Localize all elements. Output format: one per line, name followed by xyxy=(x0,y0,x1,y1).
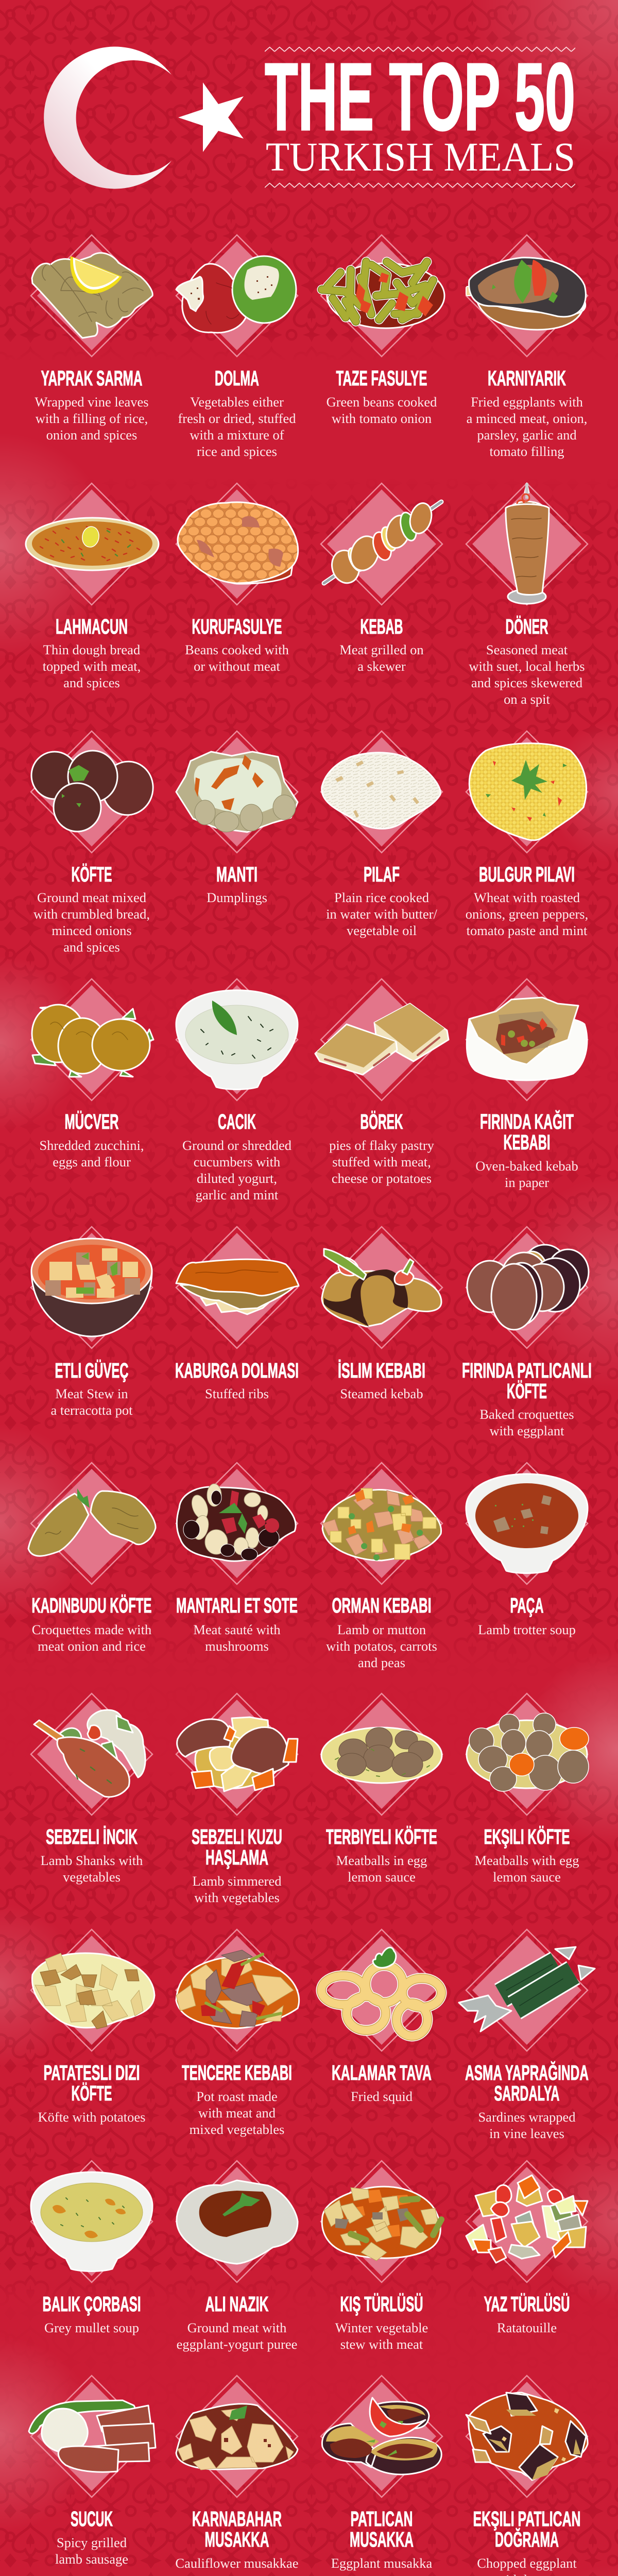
panel: Lahmacun xyxy=(26,483,159,690)
diamond xyxy=(466,979,588,1100)
description: cheese or potatoes xyxy=(332,1171,432,1186)
panel: Pilaf xyxy=(321,731,442,938)
description: Fried eggplants with xyxy=(471,394,583,410)
diamond xyxy=(176,2376,298,2497)
diamond xyxy=(466,1463,588,1584)
description: a terracotta pot xyxy=(51,1402,133,1418)
description: in paper xyxy=(505,1175,549,1190)
dish: tencere kebabi xyxy=(176,1950,299,2028)
icon: star xyxy=(178,82,244,152)
dish: yaz turlusu xyxy=(466,2175,588,2263)
dish: patlican musakka xyxy=(322,2398,441,2475)
description: rice and spices xyxy=(197,444,277,459)
description: eggplant-yogurt puree xyxy=(177,2336,297,2352)
panel: Yaz Turlusu xyxy=(466,2161,588,2335)
description: Green beans cooked xyxy=(327,394,437,410)
name line 2: DOĞRAMA xyxy=(495,2528,559,2551)
name line 2: SARDALYA xyxy=(494,2081,559,2105)
description: on a spit xyxy=(504,691,551,707)
dish: mucver xyxy=(32,1005,153,1077)
diamond xyxy=(466,2161,588,2282)
panel: Eksili Patlican Dograma xyxy=(466,2376,588,2576)
diamond xyxy=(176,1227,298,1348)
name: PILAF xyxy=(364,862,400,886)
name: SUCUK xyxy=(71,2507,113,2531)
description: Vegetables either xyxy=(190,394,284,410)
name: ALI NAZIK xyxy=(205,2292,269,2316)
name: PATLICAN xyxy=(350,2507,413,2531)
diamond xyxy=(31,1227,152,1348)
name: MÜCVER xyxy=(65,1110,118,1133)
panel: Orman Kebabi xyxy=(321,1463,442,1670)
description: and spices xyxy=(63,939,120,955)
diamond xyxy=(176,1693,298,1815)
name line 2: KEBABI xyxy=(504,1130,550,1154)
dish: ali nazik xyxy=(177,2180,298,2264)
description: Ground meat mixed xyxy=(37,890,146,905)
description: Meat grilled on xyxy=(339,642,424,657)
panel: Taze Fasulye xyxy=(321,235,444,426)
description: pies of flaky pastry xyxy=(329,1138,435,1153)
dish: kalamar tava xyxy=(321,1947,441,2036)
diamond xyxy=(176,235,298,357)
name: BÖREK xyxy=(360,1110,403,1133)
description: in water with butter/ xyxy=(326,906,437,922)
description: with tomato onion xyxy=(332,411,432,426)
description: and spices skewered xyxy=(471,675,582,690)
panel: Firinda Kagit Kebabi xyxy=(466,979,588,1190)
description: diluted yogurt, xyxy=(197,1171,277,1186)
description: Winter vegetable xyxy=(335,2320,428,2335)
description: Croquettes made with xyxy=(32,1622,151,1637)
description: mushrooms xyxy=(205,1638,269,1654)
description: onions, green peppers, xyxy=(466,906,588,922)
description: vegetable oil xyxy=(347,923,417,938)
panel: Dolma xyxy=(176,235,298,459)
dish: mantarli et sote xyxy=(177,1484,296,1561)
description: onion and spices xyxy=(46,427,137,443)
dish: asma yapraginda sardalya xyxy=(459,1947,595,2031)
description: tomato paste and mint xyxy=(467,923,588,938)
name: DÖNER xyxy=(506,615,548,638)
dish: patatesli dizi kofte xyxy=(32,1953,154,2029)
description: Wrapped vine leaves xyxy=(35,394,149,410)
panel: Kebab xyxy=(321,483,442,674)
name: MANTARLI ET SOTE xyxy=(176,1594,298,1617)
name: ETLI GÜVEÇ xyxy=(55,1359,129,1382)
name: BALIK ÇORBASI xyxy=(42,2292,141,2316)
description: Meat Stew in xyxy=(55,1386,128,1401)
diamond xyxy=(466,1693,588,1815)
name: KADINBUDU KÖFTE xyxy=(32,1594,151,1617)
description: Meatballs in egg xyxy=(336,1853,427,1868)
description: Shredded zucchini, xyxy=(39,1138,144,1153)
description: Baked croquettes xyxy=(479,1406,574,1422)
description: stew with meat xyxy=(340,2336,423,2352)
dish: kis turlusu xyxy=(322,2187,441,2261)
panel: Patatesli Dizi Kofte xyxy=(31,1929,154,2125)
dish: kebab xyxy=(324,501,441,586)
name: TERBIYELI KÖFTE xyxy=(326,1825,437,1849)
dish: dolma xyxy=(176,256,296,333)
description: garlic and mint xyxy=(196,1187,279,1202)
description: Spicy grilled xyxy=(57,2535,127,2550)
diamond xyxy=(321,731,442,853)
dish: sebzeli kuzu haslama xyxy=(177,1717,298,1791)
name: SEBZELI KUZU xyxy=(192,1825,282,1849)
panel: Patlican Musakka xyxy=(321,2376,442,2571)
panel: Sucuk xyxy=(29,2376,156,2567)
zigzag bottom xyxy=(265,182,575,189)
panel: Sebzeli Kuzu Haslama xyxy=(176,1693,298,1905)
description: or without meat xyxy=(194,658,281,674)
description: Plain rice cooked xyxy=(334,890,429,905)
panel: Bulgur Pilavi xyxy=(466,731,588,938)
name: KIŞ TÜRLÜSÜ xyxy=(340,2292,423,2316)
diamond xyxy=(176,2161,298,2282)
dish: kadinbudu kofte xyxy=(28,1488,156,1556)
description: vegetables xyxy=(63,1869,121,1885)
diamond xyxy=(31,1463,152,1584)
description: Ground meat with xyxy=(187,2320,286,2335)
panel: Kaburga Dolmasi xyxy=(175,1227,299,1401)
description: Cauliflower musakkae xyxy=(175,2555,299,2571)
dish: kaburga dolmasi xyxy=(176,1259,299,1314)
name: LAHMACUN xyxy=(56,615,128,638)
dish: paca xyxy=(466,1474,588,1573)
diamond xyxy=(321,979,442,1100)
diamond xyxy=(321,1929,442,2051)
diamond xyxy=(466,483,588,605)
description: Meat sauté with xyxy=(193,1622,281,1637)
description: a minced meat, onion, xyxy=(467,411,587,426)
description: lemon sauce xyxy=(493,1869,561,1885)
panel: Etli Guvec xyxy=(31,1227,152,1418)
name line 2: KÖFTE xyxy=(507,1379,547,1403)
diamond xyxy=(321,1693,442,1815)
panel: Doner xyxy=(466,483,588,707)
diamond xyxy=(176,979,298,1100)
description: fresh or dried, stuffed xyxy=(178,411,296,426)
dish: eksili kofte xyxy=(467,1713,589,1791)
description: Steamed kebab xyxy=(340,1386,423,1401)
description: with crumbled bread, xyxy=(33,906,150,922)
diamond xyxy=(466,731,588,853)
diamond xyxy=(321,2161,442,2282)
name: KABURGA DOLMASI xyxy=(175,1359,299,1382)
icon: crescent xyxy=(44,46,171,189)
dish: yaprak sarma xyxy=(32,253,152,338)
diamond xyxy=(31,235,152,357)
diamond xyxy=(176,1463,298,1584)
description: Dumplings xyxy=(207,890,267,905)
description: parsley, garlic and xyxy=(477,427,577,443)
panel: Kalamar Tava xyxy=(321,1929,442,2104)
description: meat onion and rice xyxy=(38,1638,146,1654)
panel: Cacik xyxy=(176,979,298,1202)
panel: Karnabahar Musakka xyxy=(175,2376,299,2571)
panel: Yaprak Sarma xyxy=(31,235,152,443)
panel: Kadinbudu Kofte xyxy=(28,1463,156,1654)
name: YAPRAK SARMA xyxy=(41,366,142,390)
dish: islim kebabi xyxy=(322,1249,441,1327)
diamond xyxy=(31,2161,152,2282)
description: Oven-baked kebab xyxy=(475,1158,578,1174)
description: topped with meat, xyxy=(43,658,141,674)
description: with a mixture of xyxy=(190,427,284,443)
dish: sebzeli incik xyxy=(34,1710,145,1797)
header xyxy=(44,44,575,189)
name: SEBZELI İNCIK xyxy=(46,1825,138,1849)
panel: Firinda Patlicanli Kofte xyxy=(462,1227,592,1438)
dish: karnabahar musakka xyxy=(176,2404,298,2470)
name line 2: KÖFTE xyxy=(71,2081,112,2105)
description: Ratatouille xyxy=(497,2320,557,2335)
diamond xyxy=(466,1227,588,1348)
description: stuffed with meat, xyxy=(332,1154,431,1170)
name: PATATESLI DIZI xyxy=(43,2061,140,2084)
name: PAÇA xyxy=(510,1594,544,1617)
name: TENCERE KEBABI xyxy=(182,2061,292,2084)
name: TAZE FASULYE xyxy=(336,366,427,390)
description: Chopped eggplant xyxy=(477,2555,577,2571)
diamond xyxy=(176,483,298,605)
description: Sardines wrapped xyxy=(478,2109,576,2125)
diamond xyxy=(321,483,442,605)
diamond xyxy=(176,731,298,853)
panel: Kurufasulye xyxy=(176,483,298,674)
panel: Kis Turlusu xyxy=(321,2161,442,2352)
description: Meatballs with egg xyxy=(474,1853,579,1868)
panel: Karnıyarık xyxy=(466,235,588,459)
description: Wheat with roasted xyxy=(474,890,580,905)
panel: Mantarli Et Sote xyxy=(176,1463,298,1654)
dish: taze fasulye xyxy=(322,262,444,328)
panel: Terbiyeli Kofte xyxy=(321,1693,442,1885)
diamond xyxy=(31,1693,152,1815)
name: KARNABAHAR xyxy=(192,2507,282,2531)
description: with a filling of rice, xyxy=(36,411,148,426)
description: Thin dough bread xyxy=(43,642,140,657)
description: minced onions xyxy=(52,923,132,938)
description: Lamb Shanks with xyxy=(41,1853,143,1868)
description: Ground or shredded xyxy=(182,1138,291,1153)
panel: Eksili Kofte xyxy=(466,1693,589,1885)
description: Stuffed ribs xyxy=(205,1386,269,1401)
zigzag top xyxy=(265,46,575,53)
name: İSLIM KEBABI xyxy=(338,1359,425,1382)
dish: borek xyxy=(315,1004,449,1075)
diamond xyxy=(321,1463,442,1584)
panel: Islim Kebabi xyxy=(321,1227,442,1401)
name: KÖFTE xyxy=(71,862,112,886)
description: with vegetables xyxy=(194,1890,280,1905)
diamond xyxy=(466,1929,588,2051)
description: lemon sauce xyxy=(348,1869,416,1885)
dish: kurufasulye xyxy=(178,502,298,584)
diamond xyxy=(466,235,588,357)
panel: Borek xyxy=(315,979,449,1186)
diamond xyxy=(31,483,152,605)
description: and spices xyxy=(63,675,120,690)
description: tomato filling xyxy=(489,444,564,459)
description: and peas xyxy=(358,1655,405,1670)
description: Grey mullet soup xyxy=(44,2320,139,2335)
diamond xyxy=(31,979,152,1100)
description: Lamb trotter soup xyxy=(478,1622,576,1637)
description: Lamb or mutton xyxy=(337,1622,426,1637)
panel: Ali Nazik xyxy=(176,2161,298,2352)
dish: doner xyxy=(506,483,549,604)
dish: balik corbasi xyxy=(31,2172,152,2271)
dish: lahmacun xyxy=(26,518,159,570)
description: lamb sausage xyxy=(55,2551,128,2567)
dish: cacik xyxy=(176,990,298,1089)
diamond xyxy=(31,1929,152,2051)
diamond xyxy=(321,1227,442,1348)
description: eggs and flour xyxy=(53,1154,131,1170)
name: KURUFASULYE xyxy=(192,615,282,638)
name: KEBAB xyxy=(360,615,403,638)
description: with meat and xyxy=(198,2105,276,2121)
dish: firinda kagit kebabi xyxy=(467,997,587,1080)
dish: firinda patlicanli kofte xyxy=(467,1245,589,1330)
description: Köfte with potatoes xyxy=(38,2109,146,2125)
description: Seasoned meat xyxy=(486,642,568,657)
dish: orman kebabi xyxy=(322,1488,441,1561)
description: Beans cooked with xyxy=(185,642,289,657)
diamond xyxy=(31,731,152,853)
diamond xyxy=(466,2376,588,2497)
diamond xyxy=(31,2376,152,2497)
dish: sucuk xyxy=(29,2400,156,2472)
dish: etli guvec xyxy=(31,1239,152,1336)
panel: Balik Corbasi xyxy=(31,2161,152,2335)
panel: Manti xyxy=(176,731,298,905)
panel: Kofte xyxy=(31,731,158,955)
name: KALAMAR TAVA xyxy=(332,2061,432,2084)
diamond xyxy=(321,235,442,357)
name: KARNIYARIK xyxy=(488,366,566,390)
dish: terbiyeli kofte xyxy=(321,1727,442,1783)
panel: Tencere Kebabi xyxy=(176,1929,299,2137)
subtitle: TURKISH MEALS xyxy=(266,135,575,180)
dish: kofte xyxy=(31,751,158,832)
dish: karniyarik xyxy=(466,258,586,330)
description: Pot roast made xyxy=(196,2089,278,2104)
description: mixed vegetables xyxy=(190,2122,284,2137)
description: in vine leaves xyxy=(489,2126,564,2141)
description: cucumbers with xyxy=(194,1154,280,1170)
dish: pilaf xyxy=(322,753,440,828)
name: DOLMA xyxy=(215,366,259,390)
name line 2: MUSAKKA xyxy=(205,2528,269,2551)
diamond xyxy=(176,1929,298,2051)
diamond xyxy=(321,2376,442,2497)
dish: eksili patlican dograma xyxy=(466,2393,588,2480)
description: with potatos, carrots xyxy=(326,1638,437,1654)
description: Fried squid xyxy=(351,2089,413,2104)
panel: Mucver xyxy=(31,979,153,1170)
description: Eggplant musakka xyxy=(331,2555,432,2571)
name: ORMAN KEBABI xyxy=(332,1594,432,1617)
panel: Sebzeli Incik xyxy=(31,1693,152,1885)
panel: Asma Yapraginda Sardalya xyxy=(459,1929,595,2141)
description: with eggplant xyxy=(489,1423,564,1438)
name line 2: HAŞLAMA xyxy=(205,1845,268,1869)
name line 2: MUSAKKA xyxy=(350,2528,414,2551)
name: CACIK xyxy=(218,1110,256,1133)
panel: Paca xyxy=(466,1463,588,1637)
dish: manti xyxy=(176,752,298,832)
description: with suet, local herbs xyxy=(469,658,585,674)
description: a skewer xyxy=(357,658,406,674)
name: MANTI xyxy=(216,862,258,886)
description: Lamb simmered xyxy=(193,1873,281,1889)
dish: bulgur pilavi xyxy=(469,743,587,840)
